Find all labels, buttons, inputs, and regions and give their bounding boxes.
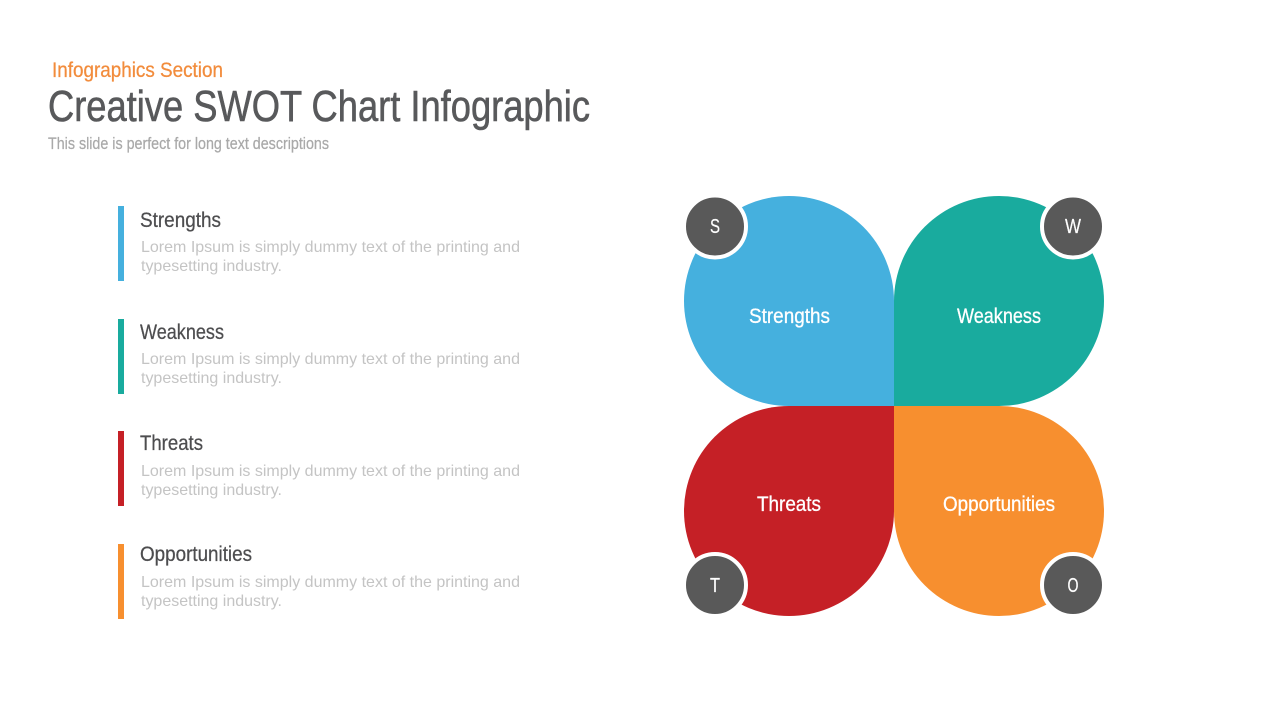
section label: Infographics Section <box>52 59 223 82</box>
badge: T: T <box>710 575 720 597</box>
list item: threats <box>118 431 520 506</box>
badge: O: O <box>1068 575 1078 597</box>
badge: S: S <box>710 216 720 238</box>
badge: W: W <box>1065 216 1081 238</box>
list item: opportunities <box>118 543 520 619</box>
list item: opportunities: Lorem Ipsum is simply dummy text of the printing and <box>141 574 520 591</box>
list item: weakness: Lorem Ipsum is simply dummy text of the printing and <box>141 351 520 368</box>
list item: opportunities: Opportunities <box>140 543 252 566</box>
subtitle: This slide is perfect for long text descriptions <box>48 134 329 153</box>
petal: weakness <box>894 196 1104 406</box>
petal: opportunities: Opportunities <box>943 493 1055 516</box>
list item: strengths: Lorem Ipsum is simply dummy text of the printing and <box>141 239 520 256</box>
title: Creative SWOT Chart Infographic <box>48 82 590 131</box>
badge: O <box>1042 554 1104 616</box>
list item: weakness: Weakness <box>140 321 224 344</box>
petal: threats <box>684 406 894 616</box>
petal: strengths: Strengths <box>749 305 830 328</box>
list item: strengths: Strengths <box>140 209 221 232</box>
list item: strengths <box>118 206 520 281</box>
petal: threats: Threats <box>757 493 821 516</box>
badge: T <box>684 554 746 616</box>
list item: opportunities: typesetting industry. <box>141 593 282 610</box>
SWOT chart <box>684 196 1104 616</box>
list item: threats: Lorem Ipsum is simply dummy text of the printing and <box>141 463 520 480</box>
badge: W <box>1042 196 1104 258</box>
list item: threats: Threats <box>140 432 203 455</box>
badge: S <box>684 196 746 258</box>
petal: opportunities <box>894 406 1104 616</box>
petal: weakness: Weakness <box>957 305 1041 328</box>
list item: weakness: typesetting industry. <box>141 370 282 387</box>
list item: strengths: typesetting industry. <box>141 258 282 275</box>
list item: weakness <box>118 319 520 394</box>
petal: strengths <box>684 196 894 406</box>
list item: threats: typesetting industry. <box>141 482 282 499</box>
